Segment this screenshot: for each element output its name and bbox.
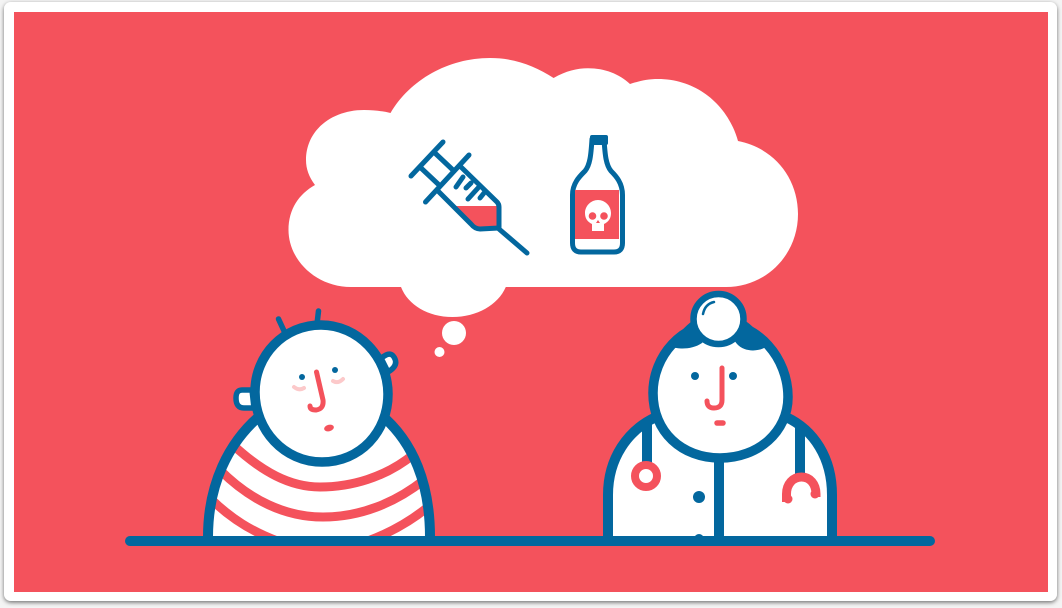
- patient character: [208, 311, 430, 542]
- patient body outline: [208, 414, 430, 537]
- bottle cap: [590, 135, 608, 145]
- patient eyes: [299, 367, 338, 380]
- bottle label: [575, 190, 619, 239]
- patient cheeks: [294, 379, 343, 389]
- head mirror: [694, 294, 744, 344]
- stethoscope tube right: [795, 425, 805, 475]
- doctor coat: [608, 417, 832, 537]
- patient right ear: [381, 354, 396, 372]
- stethoscope chest piece: [635, 465, 657, 487]
- stethoscope ear piece: [784, 477, 820, 504]
- icon: poison bottle: [572, 135, 622, 252]
- mirror shine: [703, 302, 714, 314]
- patient head: [255, 325, 388, 462]
- ground line: [125, 536, 935, 546]
- icon: syringe: [411, 142, 527, 253]
- striped shirt: [215, 445, 424, 536]
- patient left ear: [236, 390, 254, 408]
- patient body: [208, 414, 430, 537]
- skull: [585, 200, 611, 231]
- patient nose: [310, 372, 323, 410]
- patient hair: [278, 311, 318, 333]
- coat buttons: [693, 491, 705, 544]
- thought bubble large: [442, 321, 466, 345]
- doctor character: [608, 294, 832, 544]
- doctor coat outline: [608, 417, 832, 537]
- doctor eyes: [691, 372, 737, 380]
- stethoscope tube left: [642, 420, 652, 470]
- doctor mouth: [717, 420, 723, 426]
- thought bubble small: [434, 347, 444, 357]
- doctor hair: [672, 320, 766, 350]
- patient mouth: [323, 424, 335, 432]
- doctor head: [653, 323, 788, 458]
- thought cloud: [288, 58, 798, 357]
- coat placket: [714, 458, 724, 538]
- doctor nose: [707, 368, 722, 408]
